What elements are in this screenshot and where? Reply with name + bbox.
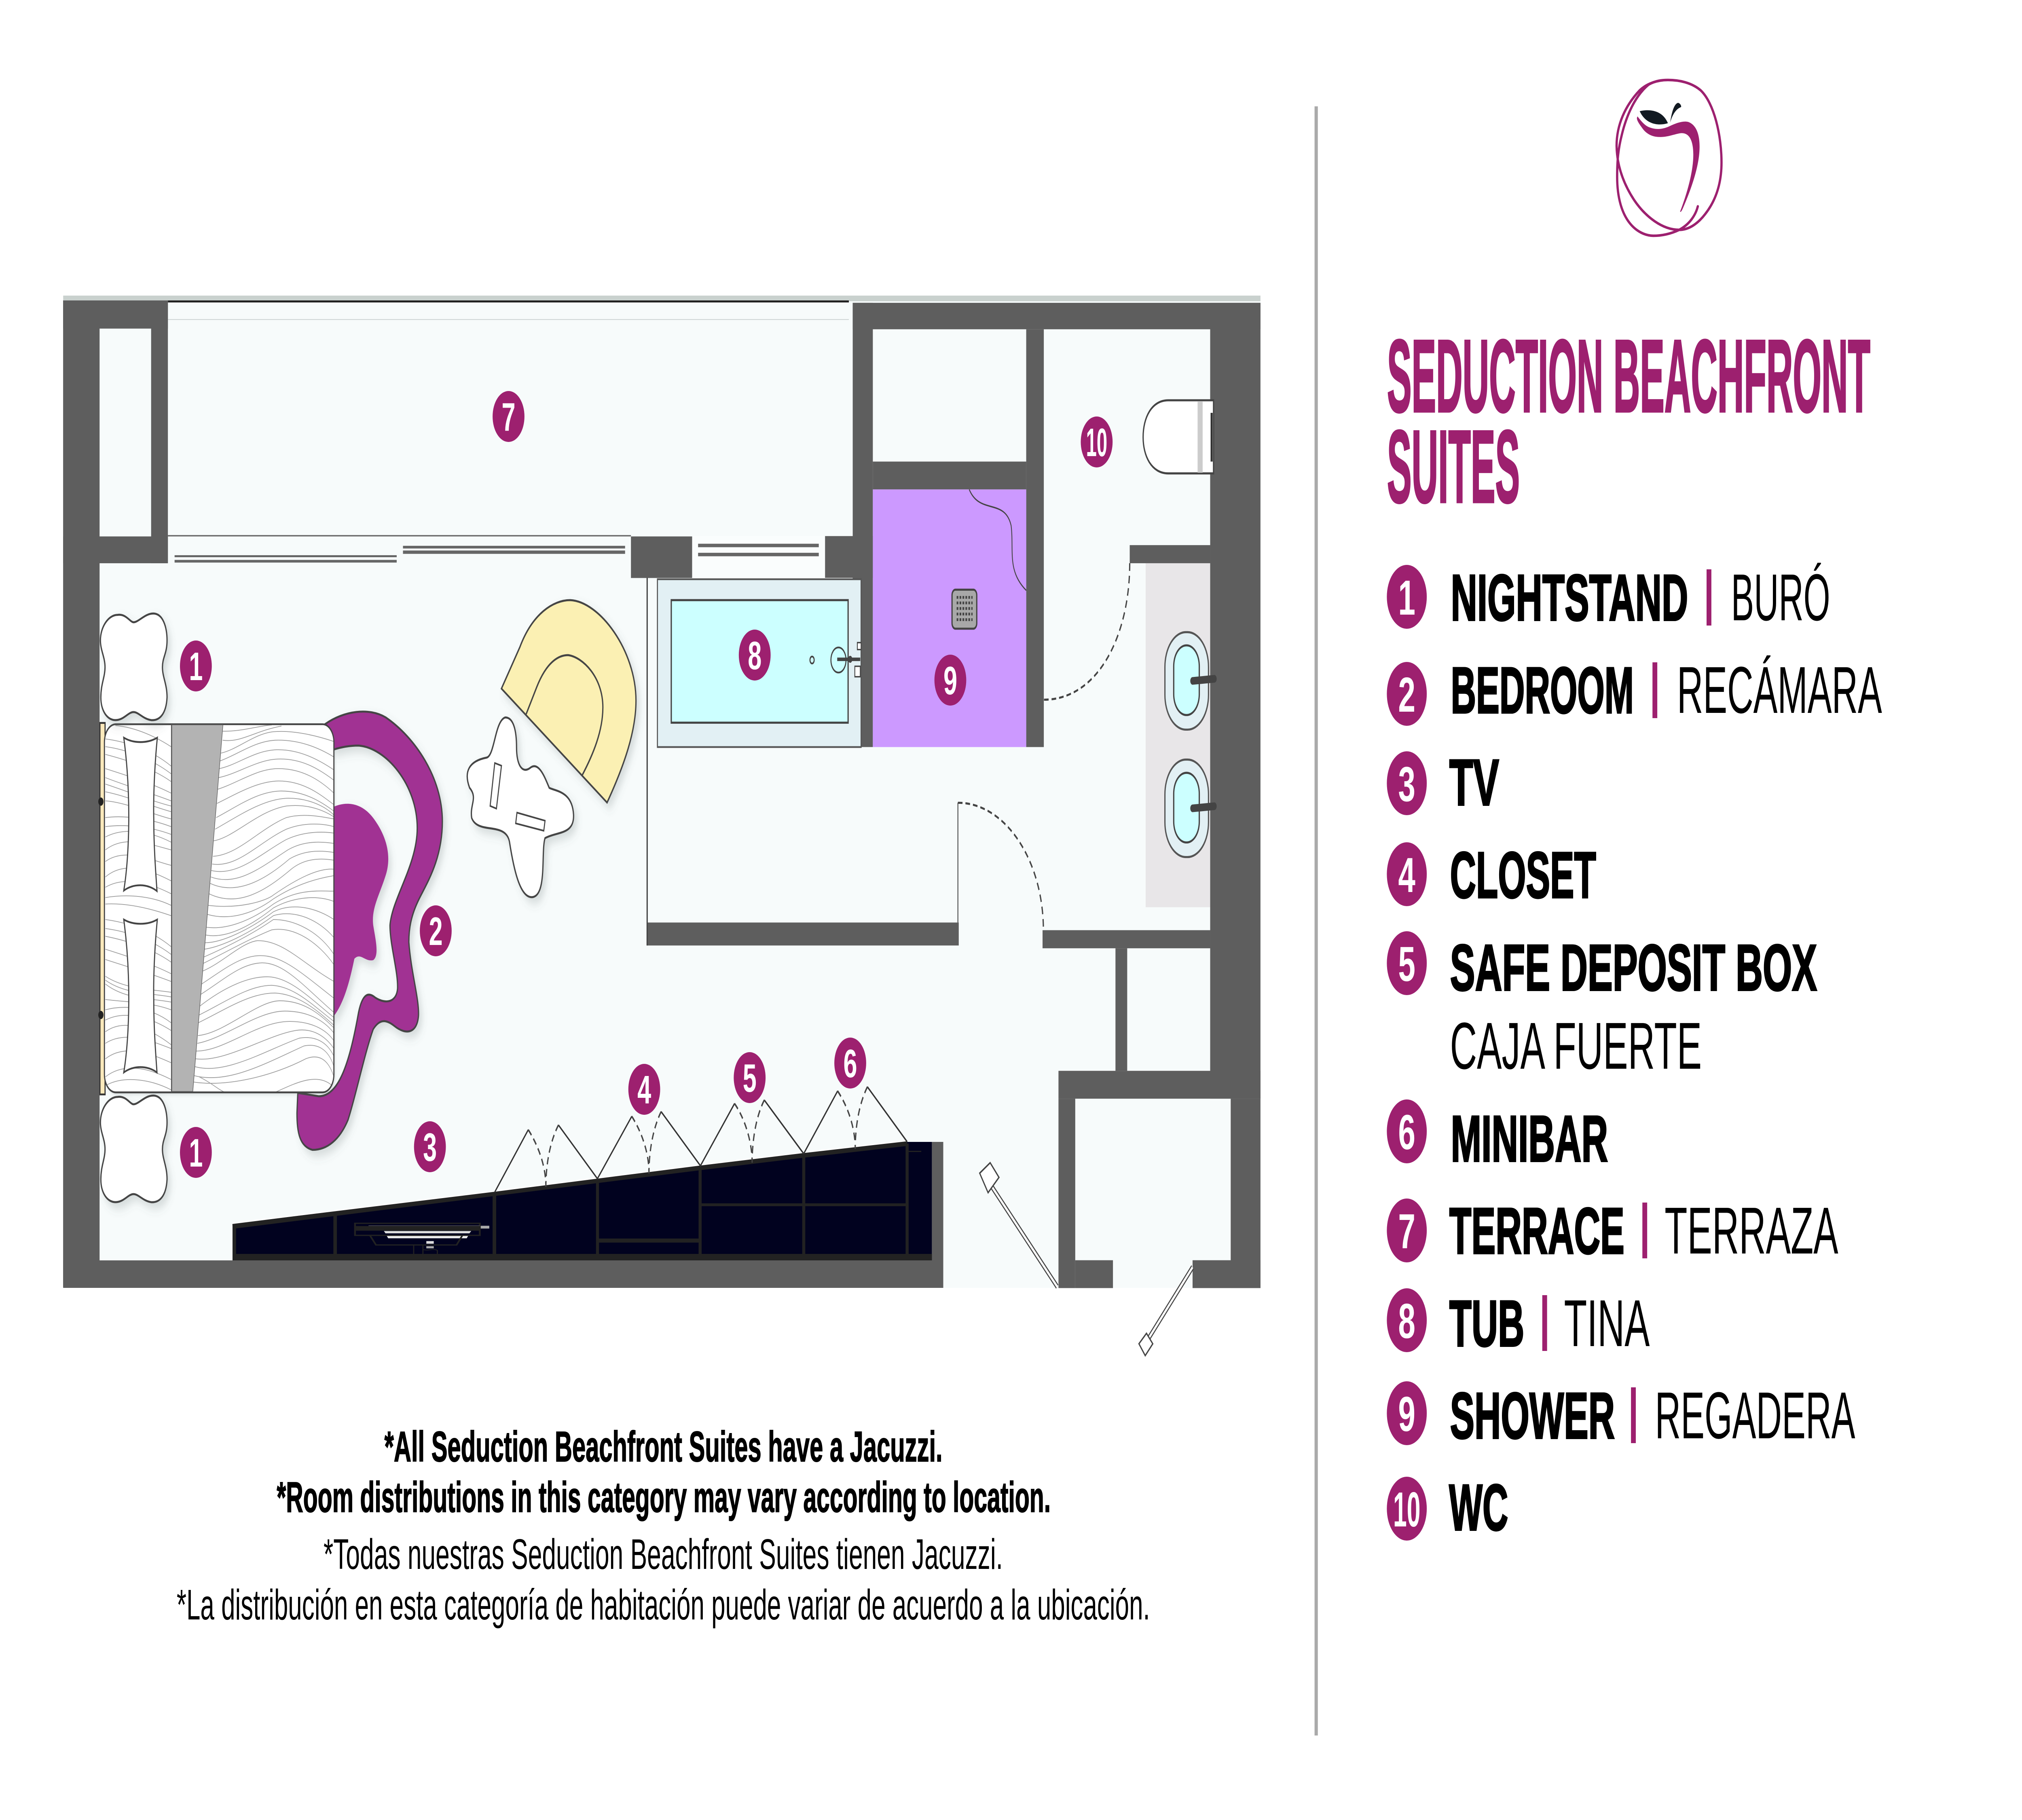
marker 5: [734, 1052, 766, 1103]
marker 3: 3: [423, 1125, 437, 1170]
note english 2: *Room distributions in this category may vary according to location.: [277, 1473, 1051, 1521]
closet and TV console: [233, 1141, 932, 1260]
legend item 3: 3: [1398, 757, 1415, 812]
legend item 2: RECÁMARA: [1677, 653, 1882, 727]
legend item 5: SAFE DEPOSIT BOX: [1450, 931, 1817, 1004]
legend item 4: [1387, 839, 1596, 912]
logo: [1616, 80, 1722, 236]
marker 9: [935, 655, 966, 706]
marker 6: [834, 1038, 866, 1089]
marker 6: 6: [843, 1042, 857, 1086]
bathtub: [658, 579, 861, 747]
legend item 7: [1387, 1193, 1838, 1268]
legend item 8: TUB: [1449, 1287, 1524, 1360]
legend item 6: MINIBAR: [1451, 1102, 1608, 1175]
rug: [297, 712, 442, 1150]
headboard: [98, 723, 105, 1095]
legend item 6: 6: [1398, 1105, 1415, 1160]
room floor: [63, 301, 1261, 1288]
legend item 9: 9: [1398, 1387, 1415, 1442]
legend item 10: WC: [1449, 1471, 1508, 1544]
title: SUITES: [1387, 410, 1520, 524]
vanity sinks: [1165, 632, 1214, 857]
toilet: [1143, 400, 1214, 473]
legend item 2: [1387, 653, 1882, 727]
legend item 9: REGADERA: [1655, 1378, 1855, 1452]
door swings: [958, 563, 1130, 930]
legend item 1: BURÓ: [1731, 560, 1830, 634]
logo apple: [1637, 116, 1700, 212]
floor plan: [63, 296, 1261, 1356]
logo leaf and stem: [1640, 103, 1681, 125]
wall: closet end: [932, 1142, 943, 1260]
legend item 8: [1387, 1286, 1650, 1360]
nightstand bottom: [100, 1095, 167, 1202]
legend item 3: [1387, 746, 1499, 819]
note spanish 2: *La distribución en esta categoría de habitación puede variar de acuerdo a la ubicación.: [177, 1581, 1150, 1629]
marker 5: 5: [743, 1056, 757, 1101]
legend item 4: CLOSET: [1450, 839, 1596, 912]
marker 1: 1: [189, 645, 203, 689]
wall: bottom: [63, 1260, 943, 1288]
marker 4: [628, 1064, 660, 1115]
marker 8: [739, 630, 771, 681]
marker 8: 8: [748, 634, 761, 678]
armchair: [501, 600, 636, 803]
legend item 3: TV: [1449, 746, 1499, 819]
legend item 6: [1387, 1099, 1608, 1175]
marker 3: [414, 1121, 446, 1172]
walls: bathroom side: [647, 303, 1261, 1288]
legend item 2: 2: [1398, 667, 1415, 722]
marker 1: 1: [189, 1131, 203, 1175]
note english 1: *All Seduction Beachfront Suites have a Jacuzzi.: [385, 1423, 943, 1471]
legend item 10: [1387, 1471, 1508, 1544]
shower: [873, 489, 1026, 747]
footnotes: [177, 1423, 1150, 1629]
legend item 2: BEDROOM: [1451, 654, 1634, 727]
entry doors: [980, 1163, 1193, 1356]
walls: bedroom side: [63, 300, 692, 1287]
legend item 7: TERRACE: [1449, 1194, 1624, 1268]
icon: shower drain: [952, 590, 977, 629]
legend item 8: TINA: [1564, 1286, 1650, 1360]
divider: [1315, 106, 1318, 1735]
legend item 9: SHOWER: [1450, 1379, 1615, 1452]
note spanish 1: *Todas nuestras Seduction Beachfront Suites tienen Jacuzzi.: [324, 1530, 1003, 1578]
closet doors: [495, 1087, 907, 1192]
marker 10: 10: [1086, 421, 1107, 465]
marker 1: [180, 1127, 212, 1178]
marker 2: [420, 905, 452, 956]
legend item 1: [1387, 560, 1830, 634]
legend item 9: [1387, 1378, 1855, 1452]
marker 9: 9: [943, 659, 957, 703]
marker 2: 2: [429, 909, 443, 954]
duvet fold: [171, 724, 223, 1092]
top edge strip: [63, 296, 1261, 301]
legend item 5: [1387, 931, 1817, 1083]
marker 1: [180, 640, 212, 691]
legend item 5: CAJA FUERTE: [1450, 1008, 1702, 1083]
terrace: [168, 300, 849, 562]
bed: [98, 723, 334, 1095]
nightstand top: [100, 613, 167, 720]
plan markers: [180, 391, 1113, 1178]
mattress: [104, 724, 334, 1092]
legend item 5: 5: [1398, 936, 1415, 991]
marker 7: 7: [501, 395, 516, 440]
legend: [1387, 560, 1882, 1544]
legend item 1: 1: [1398, 570, 1415, 625]
title: [1387, 319, 1870, 524]
legend item 8: 8: [1398, 1294, 1415, 1349]
marker 7: [493, 391, 525, 442]
logo ring: [1616, 80, 1722, 236]
TV: [355, 1223, 489, 1254]
legend item 10: 10: [1393, 1482, 1420, 1537]
side table: [467, 717, 573, 897]
legend item 7: TERRAZA: [1665, 1193, 1838, 1268]
legend item 7: 7: [1398, 1204, 1415, 1259]
marker 4: 4: [637, 1068, 651, 1112]
pillows: [124, 738, 157, 1072]
legend item 1: NIGHTSTAND: [1451, 561, 1688, 634]
legend item 4: 4: [1398, 848, 1415, 903]
